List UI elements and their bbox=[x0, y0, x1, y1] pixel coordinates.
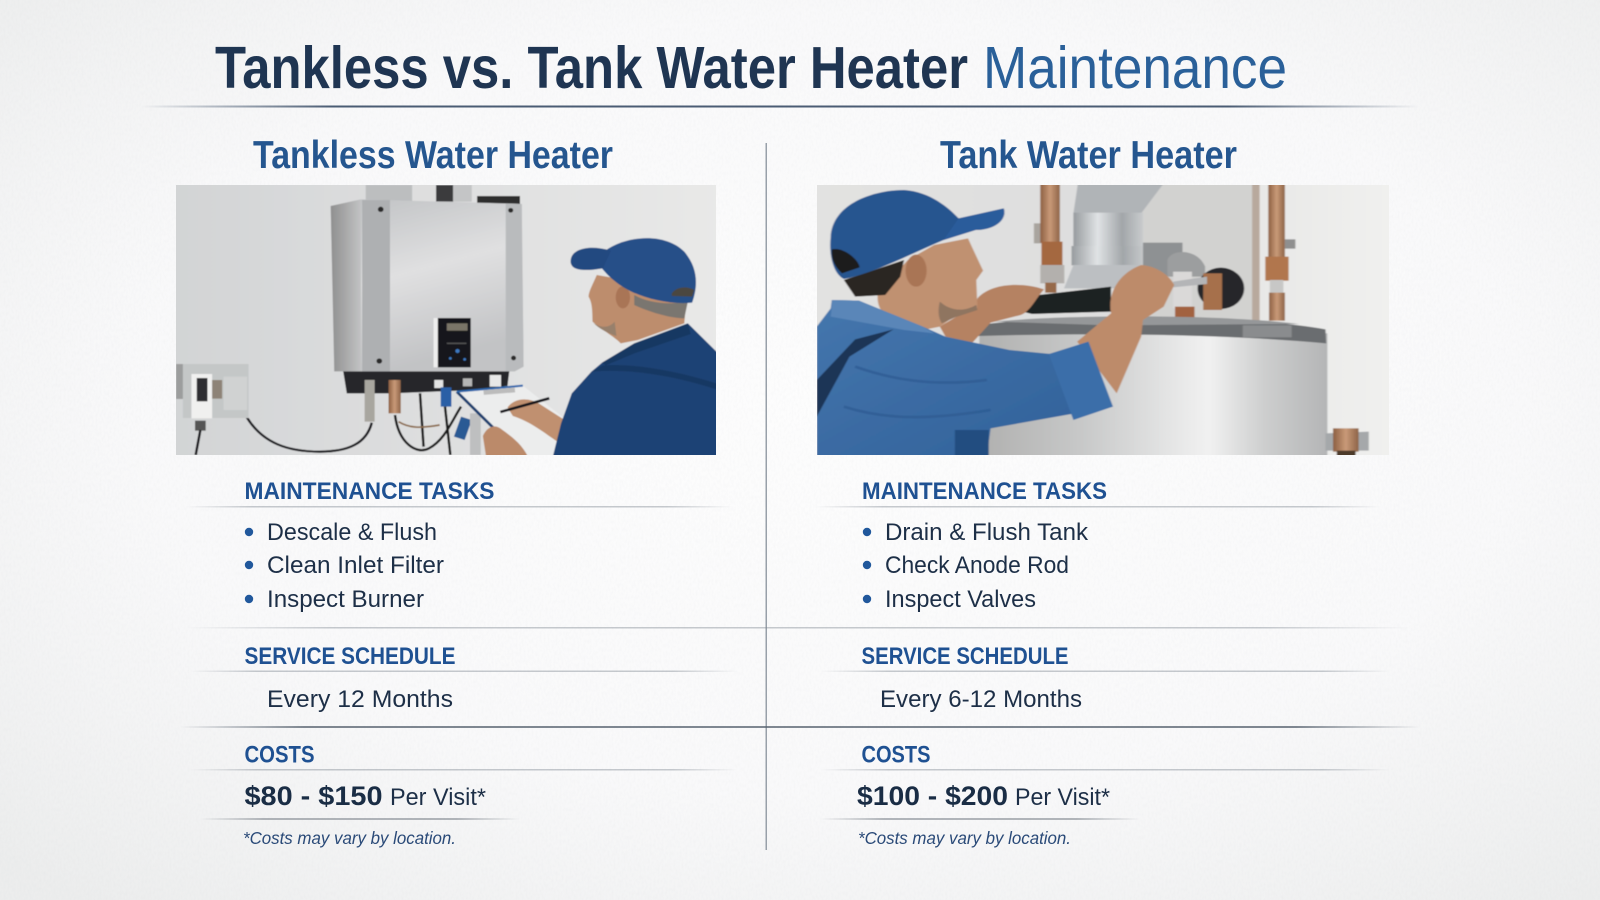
section: maintenance tasks: Check Anode Rod bbox=[885, 552, 1069, 579]
section: costs: *Costs may vary by location. bbox=[243, 828, 456, 848]
section: costs: Per Visit* bbox=[1015, 784, 1110, 811]
section: costs bbox=[190, 742, 738, 848]
title: Maintenance bbox=[983, 35, 1287, 101]
photo: technician at tank heater bbox=[810, 180, 1400, 460]
section: service schedule bbox=[190, 643, 738, 713]
heading: tank: Tank Water Heater bbox=[940, 134, 1237, 177]
section: costs bbox=[820, 742, 1390, 848]
section: maintenance tasks: Inspect Burner bbox=[267, 586, 424, 613]
section: service schedule bbox=[820, 643, 1390, 713]
section: service schedule: SERVICE SCHEDULE bbox=[862, 643, 1068, 670]
section: service schedule: Every 12 Months bbox=[267, 686, 453, 713]
photo: technician at tankless heater bbox=[170, 180, 730, 460]
heading: tankless: Tankless Water Heater bbox=[253, 134, 613, 177]
section: costs: COSTS bbox=[244, 742, 314, 768]
section: costs: Per Visit* bbox=[390, 784, 486, 811]
title: Tankless vs. Tank Water Heater bbox=[215, 35, 968, 101]
section: maintenance tasks: Clean Inlet Filter bbox=[267, 552, 444, 579]
section: maintenance tasks bbox=[815, 478, 1380, 613]
section: costs: COSTS bbox=[862, 742, 930, 768]
section: maintenance tasks: MAINTENANCE TASKS bbox=[244, 478, 494, 505]
panel: tankless water heater bbox=[170, 134, 738, 848]
section: costs: $100 - $200 bbox=[857, 781, 1008, 811]
section: maintenance tasks: MAINTENANCE TASKS bbox=[862, 478, 1107, 505]
section: service schedule: SERVICE SCHEDULE bbox=[244, 643, 456, 670]
section: maintenance tasks: Descale & Flush bbox=[267, 519, 437, 546]
section: service schedule: Every 6-12 Months bbox=[880, 686, 1082, 713]
section: maintenance tasks bbox=[185, 478, 733, 613]
section: maintenance tasks: Inspect Valves bbox=[885, 586, 1036, 613]
panel: tank water heater bbox=[810, 134, 1400, 848]
section: maintenance tasks: Drain & Flush Tank bbox=[885, 519, 1089, 546]
section: costs: $80 - $150 bbox=[244, 781, 382, 811]
section: costs: *Costs may vary by location. bbox=[858, 828, 1071, 848]
